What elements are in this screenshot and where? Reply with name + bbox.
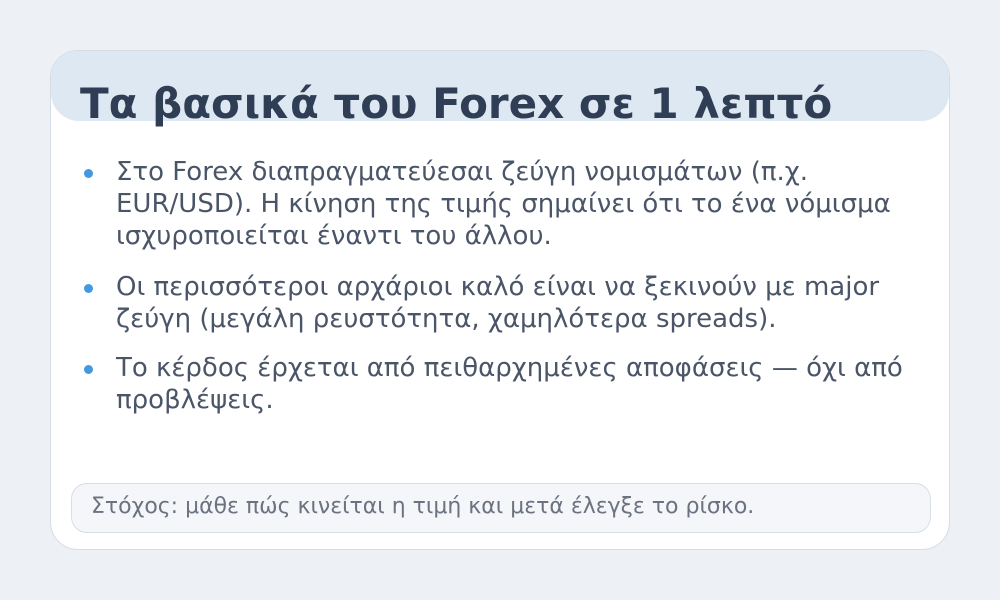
footer note [71, 483, 931, 533]
bullet 2: Οι περισσότεροι αρχάριοι καλό είναι να ξεκινούν με major ζεύγη (μεγάλη ρευστότητα, χαμηλότερα spreads). [116, 272, 879, 334]
title: Τα βασικά του Forex σε 1 λεπτό [80, 79, 832, 128]
panel: card [50, 50, 950, 550]
footer note: Στόχος: μάθε πώς κινείται η τιμή και μετά έλεγξε το ρίσκο. [91, 494, 754, 519]
header band [51, 51, 949, 121]
bullet 3: Το κέρδος έρχεται από πειθαρχημένες αποφάσεις — όχι από προβλέψεις. [116, 353, 903, 415]
bullet list [84, 157, 903, 415]
bullet 1: Στο Forex διαπραγματεύεσαι ζεύγη νομισμάτων (π.χ. EUR/USD). Η κίνηση της τιμής σημαίνει ότι το ένα νόμισμα ισχυροποιείται έναντι του άλλου. [116, 157, 891, 251]
